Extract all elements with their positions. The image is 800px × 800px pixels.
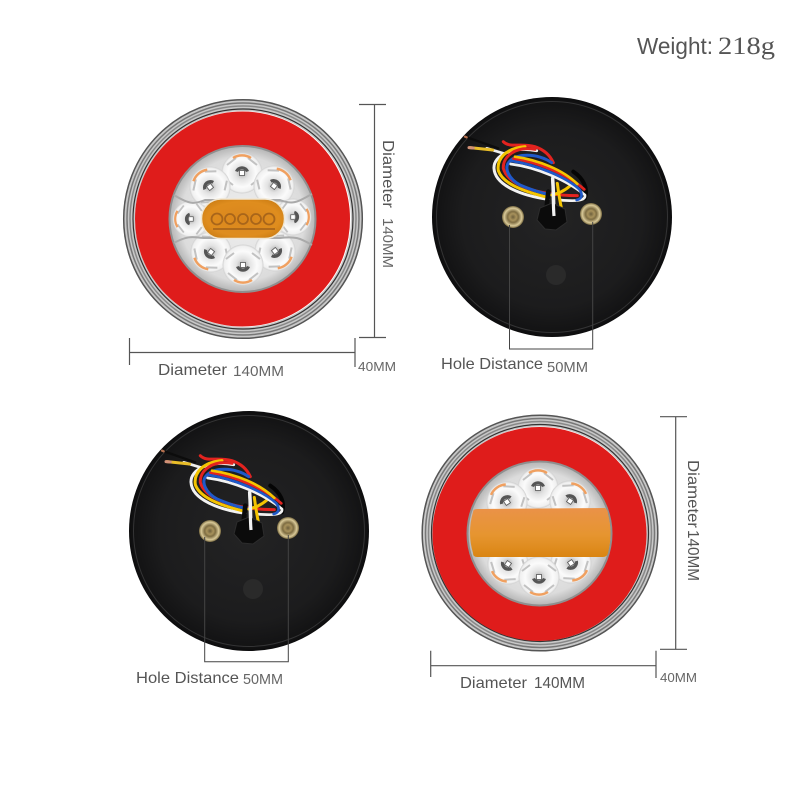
red ring (450, 444, 629, 624)
label: bottom hole distance: 50MM (243, 672, 283, 688)
LED cluster (170, 146, 316, 292)
red ring (152, 129, 332, 309)
mounting nuts (502, 203, 602, 228)
label: lamp 1 height: Diameter (379, 140, 396, 209)
label: bottom hole distance (136, 670, 283, 688)
hole distance bracket: bottom (205, 535, 288, 662)
grommet (234, 517, 264, 544)
dimensions: lamp 4 (431, 417, 687, 678)
label: lamp 1 width (158, 362, 284, 380)
lamp: back view top right (432, 97, 672, 337)
label: lamp 4 width (460, 675, 585, 692)
chrome bezel (124, 100, 362, 338)
label: lamp 4 width: Diameter (460, 675, 528, 692)
lamp: front view with amber band (422, 415, 658, 651)
LED cluster (468, 462, 612, 606)
wiring (162, 451, 283, 531)
label: lamp 4 height: 140MM (684, 530, 701, 581)
label: top hole distance: Hole Distance (441, 356, 543, 373)
label: lamp 1 depth: 40MM (358, 359, 396, 374)
weight label: 218g (718, 33, 776, 60)
dimensions: lamp 1 (130, 104, 386, 367)
weight label (637, 33, 776, 60)
label: lamp 4 height: Diameter (684, 460, 701, 529)
chrome bezel (422, 415, 658, 651)
weight label: Weight: (637, 33, 713, 59)
grommet (537, 203, 567, 230)
amber turn indicator (202, 199, 284, 238)
amber turn band (470, 508, 610, 557)
lamp: front view with amber oval (124, 100, 362, 338)
label: lamp 1 height: 140MM (379, 218, 395, 268)
label: lamp 1 width: 140MM (233, 364, 284, 380)
label: lamp 4 depth: 40MM (660, 670, 697, 685)
mounting nuts (199, 517, 299, 542)
label: lamp 4 width: 140MM (534, 675, 585, 692)
label: lamp 1 width: Diameter (158, 362, 228, 379)
hole distance bracket: top (510, 222, 593, 349)
label: lamp 1 height (379, 140, 396, 268)
lamp: back view bottom left (129, 411, 369, 651)
label: top hole distance (441, 356, 588, 376)
label: top hole distance: 50MM (547, 360, 588, 376)
wiring (465, 137, 586, 217)
label: lamp 4 height (684, 460, 701, 581)
label: bottom hole distance: Hole Distance (136, 670, 239, 687)
